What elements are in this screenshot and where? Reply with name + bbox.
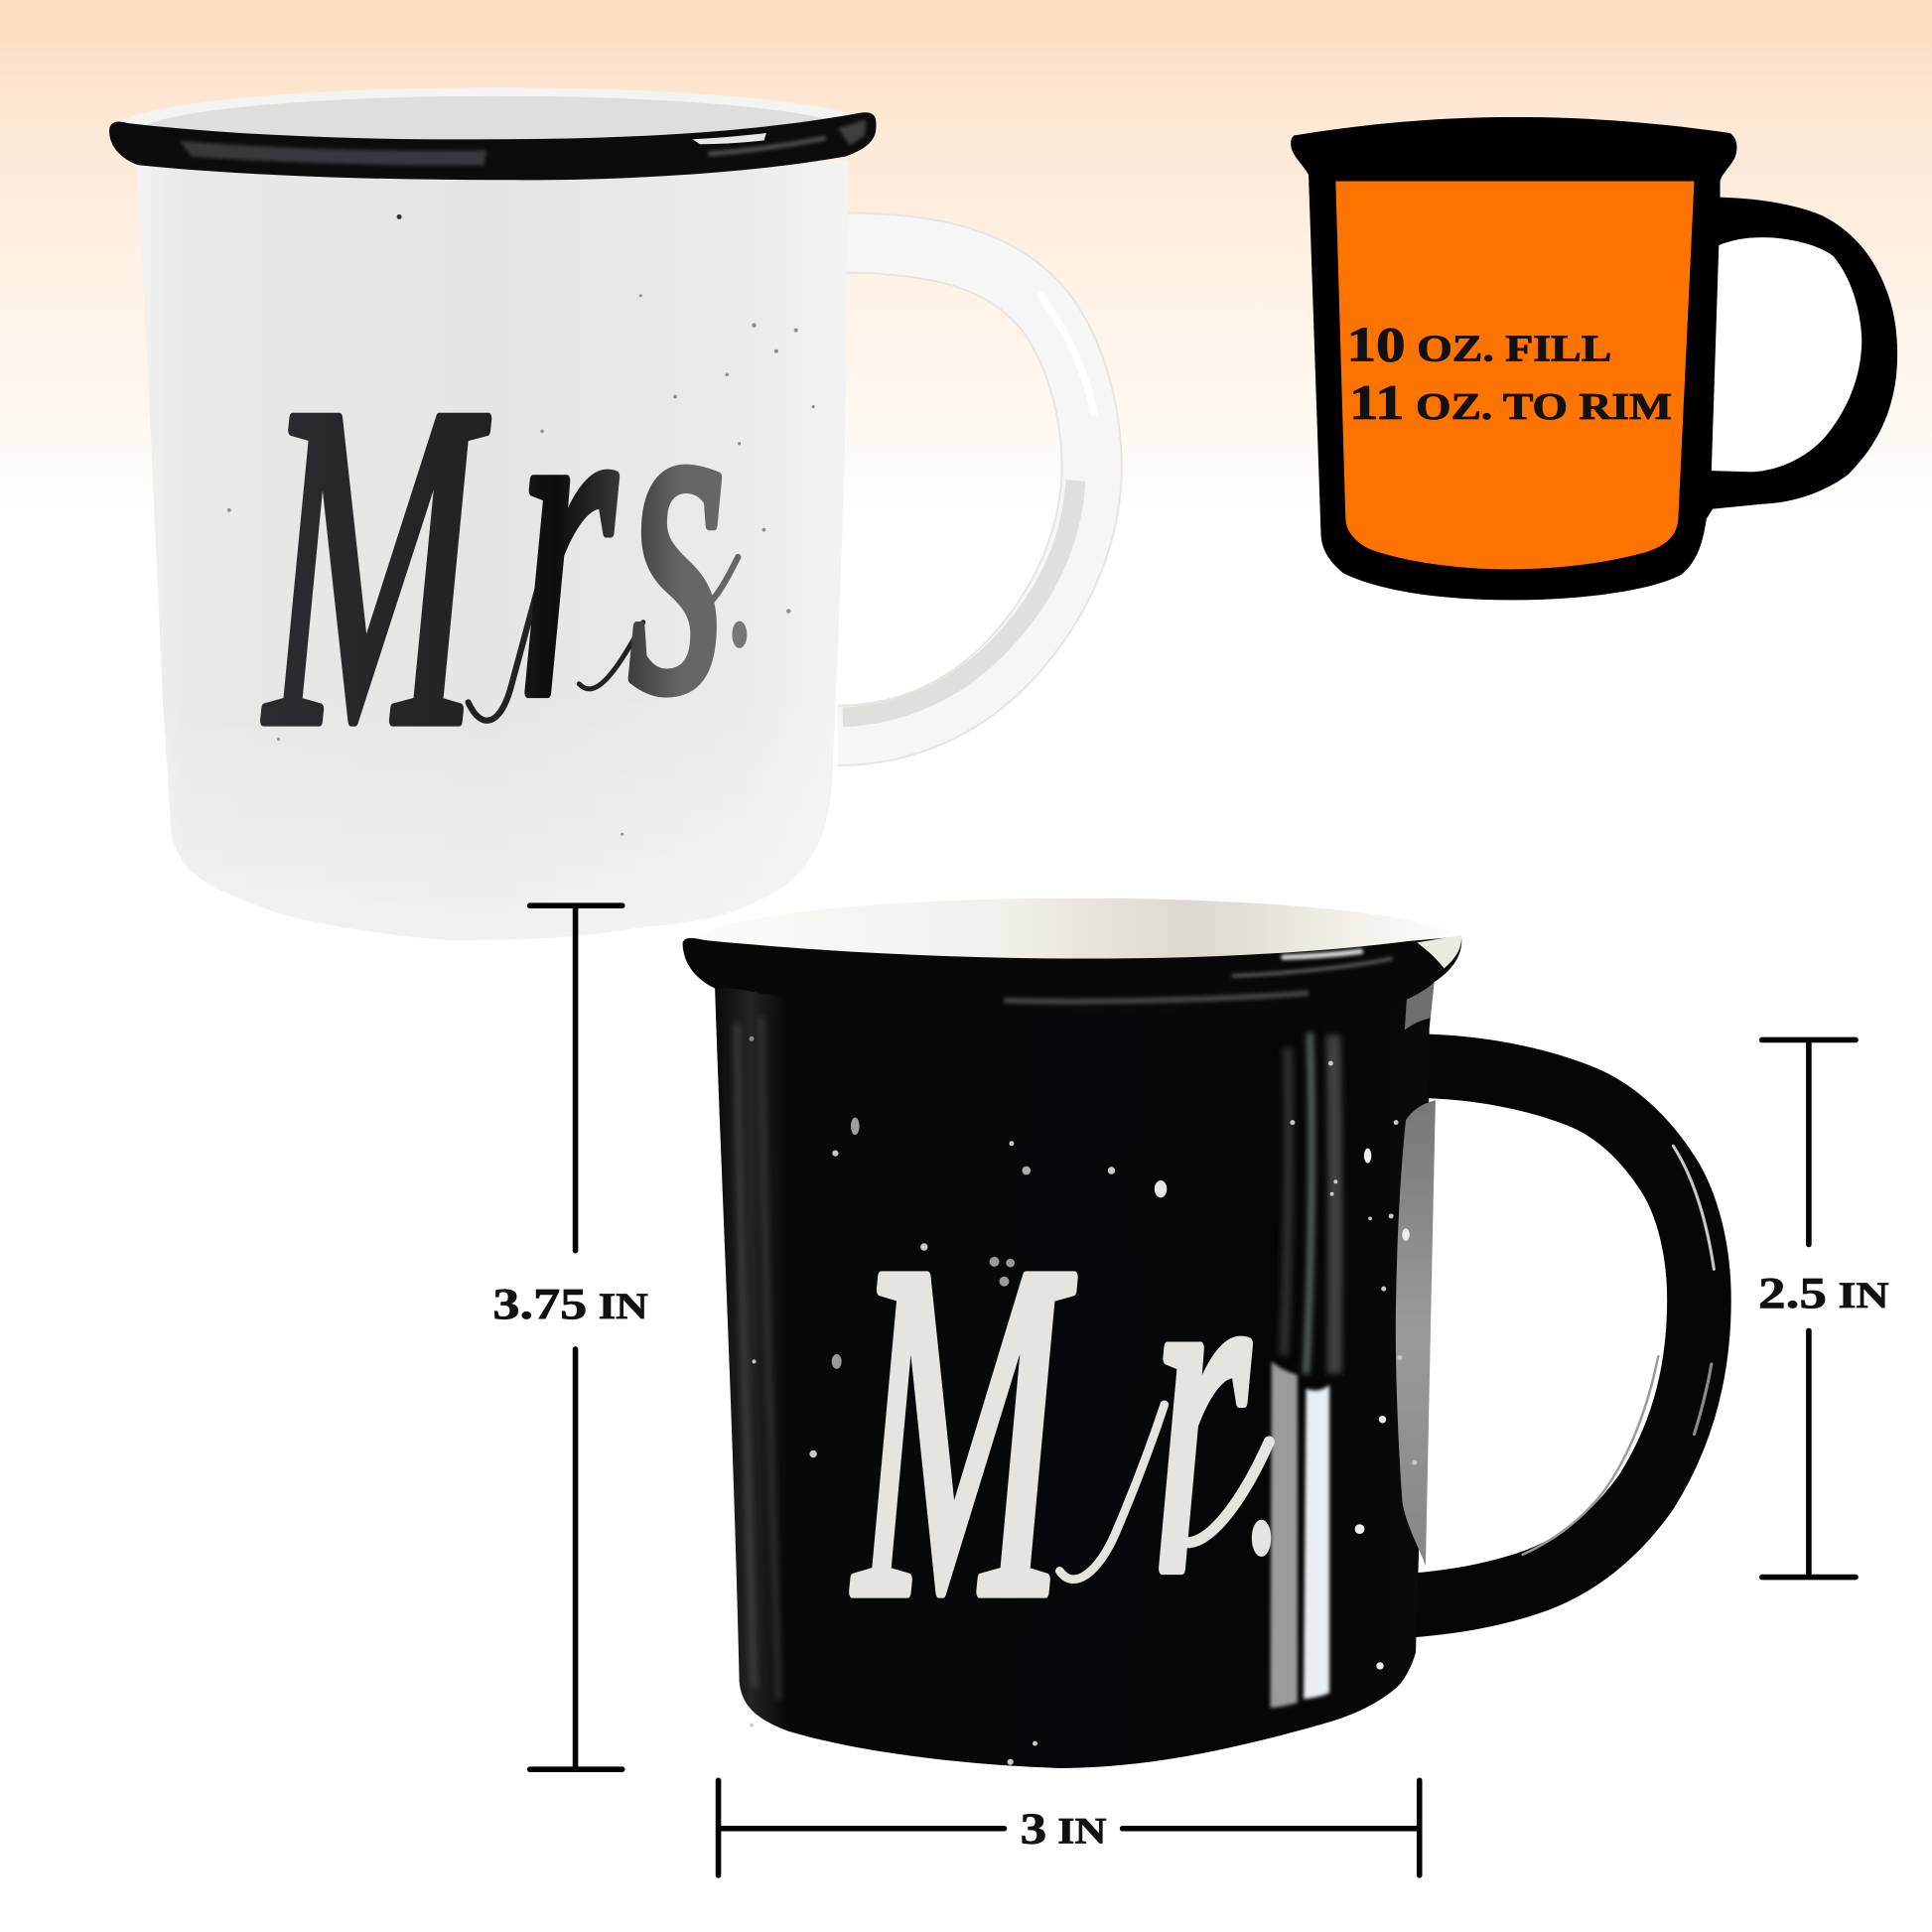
black mug white glare bbox=[1304, 1385, 1329, 1699]
Mrs. lettering: r bbox=[517, 282, 621, 793]
Mr. lettering: . bbox=[1250, 1362, 1278, 1593]
white mug inner opening bbox=[116, 87, 875, 170]
capacity mug silhouette bbox=[1291, 117, 1897, 600]
capacity label bbox=[1346, 318, 1672, 430]
Mrs. lettering: s bbox=[628, 278, 727, 788]
white Mrs. mug bbox=[109, 87, 1094, 940]
Mrs. lettering flourishes bbox=[469, 530, 738, 721]
Mr. lettering: M bbox=[851, 1165, 1077, 1697]
white mug lower glow bbox=[162, 690, 834, 940]
Mrs. lettering: M bbox=[262, 311, 491, 822]
black mug vertical shines bbox=[737, 1017, 1335, 1701]
black mug grey glare bbox=[1271, 1361, 1298, 1708]
black mug inner opening bbox=[694, 898, 1462, 987]
dimension: width 3 in: 3 IN bbox=[1021, 1804, 1107, 1854]
dimension: width 3 in bbox=[719, 1780, 1420, 1875]
black mug speckles bbox=[750, 1036, 1417, 1765]
capacity diagram mug bbox=[1291, 117, 1897, 600]
capacity mug handle opening bbox=[1712, 237, 1862, 472]
white mug black rim bbox=[109, 112, 877, 180]
dimension: height 3.75 in bbox=[492, 905, 648, 1769]
white mug rim shine bbox=[180, 119, 866, 166]
black mug rim bbox=[683, 936, 1461, 1014]
black mug rim lip bbox=[1417, 935, 1461, 968]
black mug handle bbox=[1411, 1066, 1714, 1605]
capacity label: 11 OZ. TO RIM bbox=[1349, 375, 1672, 430]
black mug shoulder highlight bbox=[1405, 982, 1435, 1031]
white mug handle bbox=[838, 242, 1094, 736]
capacity orange fill bbox=[1335, 181, 1694, 569]
white mug speckles bbox=[227, 214, 815, 836]
black mug rim shine bbox=[1004, 951, 1392, 1002]
black Mr. mug bbox=[683, 898, 1714, 1768]
Mrs. lettering: . bbox=[732, 520, 751, 670]
white mug body bbox=[137, 160, 848, 940]
dimension: handle height 2.5 in bbox=[1758, 1039, 1889, 1578]
Mr. lettering flourishes bbox=[1059, 1405, 1269, 1580]
dimension: handle height 2.5 in: 2.5 IN bbox=[1758, 1268, 1889, 1317]
black mug handle-gap panel bbox=[1396, 1100, 1436, 1566]
capacity label: 10 OZ. FILL bbox=[1346, 318, 1611, 372]
dimension: height 3.75 in: 3.75 IN bbox=[492, 1279, 648, 1328]
black mug body bbox=[715, 980, 1435, 1768]
Mr. lettering: r bbox=[1152, 1142, 1253, 1673]
